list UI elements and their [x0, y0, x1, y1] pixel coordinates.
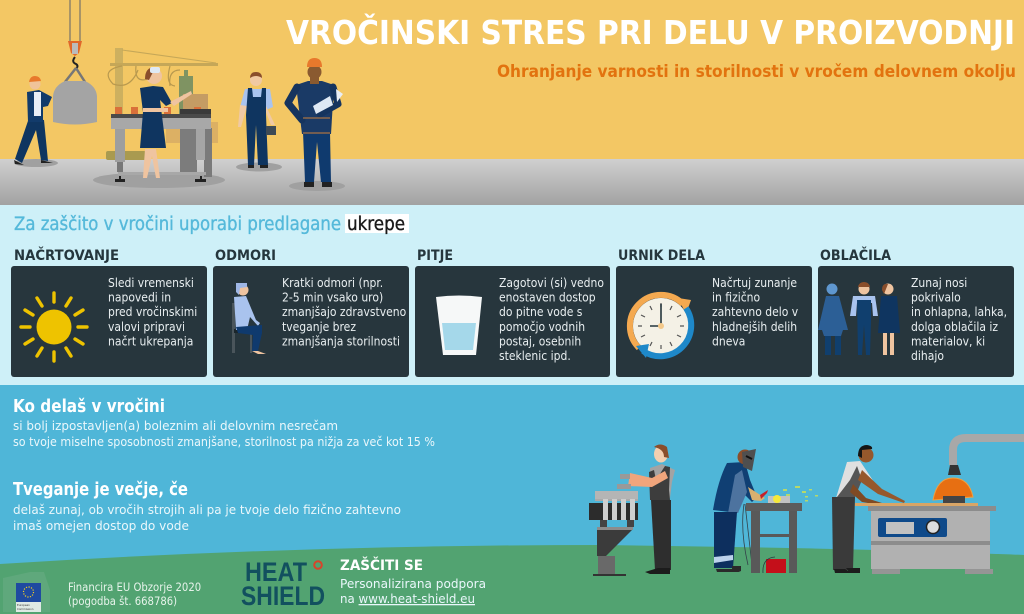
panel: odmori: ODMORI — [215, 248, 276, 264]
worker in overalls with toolbox — [238, 72, 276, 168]
panel: odmori — [213, 248, 409, 377]
text block: Načrtuj zunanje — [712, 276, 797, 290]
icon: clock — [630, 295, 691, 358]
text block: steklenic ipd. — [499, 349, 571, 363]
icon: sun — [21, 293, 87, 361]
panel: urnik dela: URNIK DELA — [618, 248, 706, 264]
EU emblem: Commission — [17, 607, 34, 611]
call to action — [340, 556, 486, 606]
illustration: workers at machines — [589, 438, 1024, 576]
panel: načrtovanje — [11, 246, 207, 377]
text block: pomočjo vodnih — [499, 320, 585, 334]
panel: načrtovanje: NAČRTOVANJE — [14, 246, 119, 264]
text block: enostaven dostop — [499, 290, 596, 304]
text block: higher risk — [13, 479, 401, 533]
risk section background — [0, 385, 1024, 614]
EU emblem: European — [17, 603, 30, 607]
title: VROČINSKI STRES PRI DELU V PROIZVODNJI — [286, 12, 1015, 52]
panel: urnik dela — [616, 248, 812, 377]
HEAT-SHIELD logo: SHIELD — [241, 581, 325, 611]
EU emblem — [3, 572, 50, 612]
tips heading: ukrepe — [347, 214, 405, 235]
call to action: Personalizirana podpora — [340, 576, 486, 591]
text block: Zunaj nosi — [911, 276, 967, 290]
text block: higher risk: delaš zunaj, ob vročih strojih ali pa je tvoje delo fizično zahtevno — [13, 502, 401, 517]
text block: dneva — [712, 334, 745, 348]
HEAT-SHIELD logo — [241, 557, 325, 611]
floor shadows — [14, 159, 345, 191]
tips section background — [0, 205, 1024, 385]
text block: working in heat: si bolj izpostavljen(a) boleznim ali delovnim nesrečam — [13, 418, 338, 433]
text block: valovi pripravi — [108, 320, 185, 334]
text block: working in heat: Ko delaš v vročini — [13, 396, 165, 417]
carpenter — [832, 445, 905, 573]
funding note: Financira EU Obzorje 2020 — [68, 581, 201, 594]
HEAT-SHIELD logo: HEAT — [245, 557, 307, 587]
text block: working in heat — [13, 396, 435, 449]
welding table with sparks — [746, 486, 818, 573]
foreman with clipboard — [288, 58, 343, 187]
text block: zmanjšajo zdravstveno — [282, 305, 407, 319]
call to action: ZAŠČITI SE — [340, 556, 423, 574]
engine machine — [589, 491, 638, 576]
text block: higher risk: imaš omejen dostop do vode — [13, 518, 189, 533]
text block: napovedi in — [108, 290, 171, 304]
text block: materialov, ki — [911, 334, 985, 348]
crane with sack — [53, 0, 97, 124]
female worker — [140, 67, 192, 178]
text block: in fizično — [712, 290, 761, 304]
text block: postaj, osebnih — [499, 334, 581, 348]
welder — [713, 449, 765, 572]
text block: dihajo — [911, 349, 944, 363]
icon: three workers in clothing — [818, 282, 900, 355]
text block: zmanjšanja storilnosti — [282, 334, 400, 348]
mechanic — [617, 444, 675, 574]
text block: tveganje brez — [282, 320, 356, 334]
factory floor — [0, 159, 1024, 205]
tips heading: Za zaščito v vročini uporabi predlagane — [14, 214, 341, 235]
text block: pred vročinskimi — [108, 305, 197, 319]
icon: seated woman — [232, 283, 266, 354]
panel: pitje: PITJE — [417, 248, 453, 264]
subtitle: Ohranjanje varnosti in storilnosti v vročem delovnem okolju — [497, 62, 1016, 82]
text block: pokrivalo — [911, 290, 961, 304]
text block: do pitne vode s — [499, 305, 583, 319]
assembly machine backdrop — [106, 48, 218, 160]
worker with helmet near sack — [14, 76, 53, 165]
call to action: na www.heat-shield.eu — [340, 591, 475, 606]
text block: Sledi vremenski — [108, 276, 194, 290]
text block: načrt ukrepanja — [108, 334, 193, 348]
icon: water glass — [436, 296, 482, 355]
text block: higher risk: Tveganje je večje, če — [13, 479, 188, 500]
text block: zahtevno delo v — [712, 305, 799, 319]
text block: Zagotovi (si) vedno — [499, 276, 604, 290]
text block: hladnejših delih — [712, 320, 797, 334]
panel: pitje — [415, 248, 610, 377]
illustration: factory scene — [14, 0, 345, 191]
text block: working in heat: so tvoje miselne sposobnosti zmanjšane, storilnost pa nižja za več kot 15 % — [13, 434, 435, 449]
table saw with extractor — [855, 438, 1024, 574]
text block: in ohlapna, lahka, — [911, 305, 1007, 319]
text block: 2-5 min vsako uro) — [282, 290, 383, 304]
conveyor table — [111, 107, 212, 182]
funding note: (pogodba št. 668786) — [68, 595, 177, 608]
text block: Kratki odmori (npr. — [282, 276, 383, 290]
green ground — [0, 545, 1024, 614]
panel: oblačila: OBLAČILA — [820, 246, 892, 264]
header background — [0, 0, 1024, 160]
text block: dolga oblačila iz — [911, 320, 998, 334]
panel: oblačila — [818, 246, 1014, 377]
